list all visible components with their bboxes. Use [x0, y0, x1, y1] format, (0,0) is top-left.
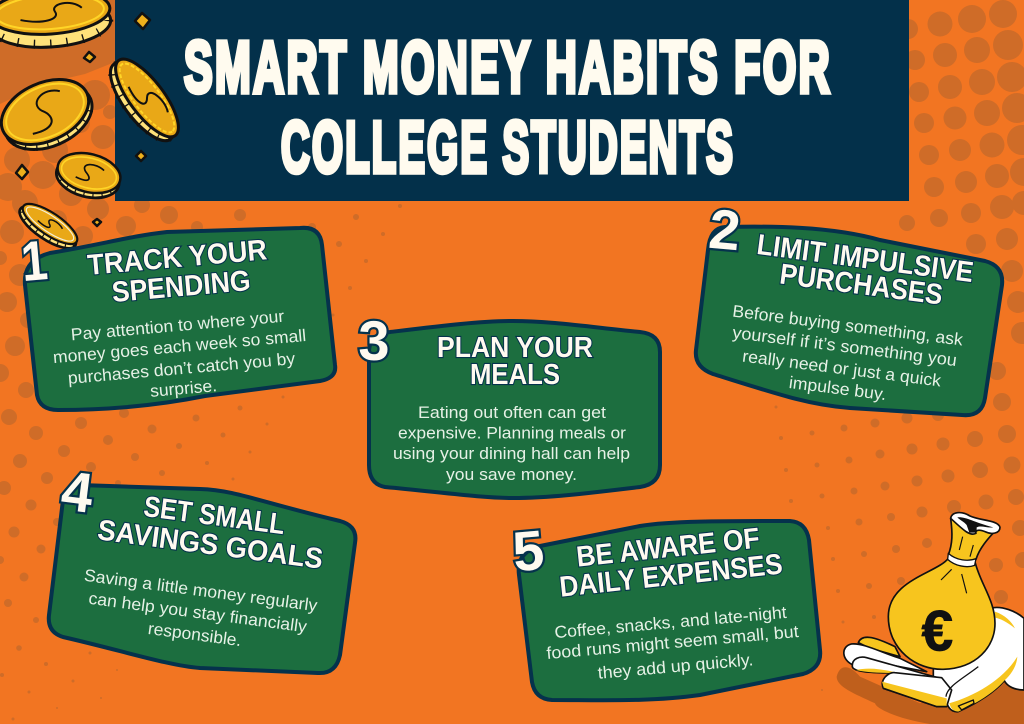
- body text: Pay attention to where your: [70, 307, 285, 344]
- heading: MEALS: [470, 359, 560, 391]
- body text: Saving a little money regularly: [83, 566, 319, 615]
- panel 2: limit impulsive purchases: [696, 197, 1002, 415]
- heading: SET SMALL: [142, 491, 287, 541]
- hand: [844, 607, 1024, 712]
- icon: money bag on open hand: [837, 513, 1024, 724]
- body text: money goes each week so small: [52, 326, 307, 367]
- heading: SAVINGS GOALS: [96, 514, 325, 576]
- panel 5: be aware of daily expenses: [510, 518, 820, 700]
- body text: using your dining hall can help: [393, 444, 630, 463]
- number 3: 3: [358, 309, 390, 372]
- body text: impulse buy.: [788, 373, 887, 404]
- back finger: [858, 637, 900, 657]
- body text: you save money.: [446, 465, 577, 484]
- body text: [731, 302, 964, 404]
- heading: BE AWARE OF: [575, 523, 761, 574]
- finger one: [844, 644, 927, 672]
- body text: really need or just a quick: [741, 347, 943, 391]
- heading: [96, 491, 325, 576]
- heading: SPENDING: [111, 265, 252, 309]
- body text: [83, 566, 319, 650]
- number 1: 1: [19, 228, 50, 293]
- number 4: 4: [58, 458, 97, 525]
- heading: LIMIT IMPULSIVE: [755, 229, 975, 289]
- heading: [437, 332, 593, 391]
- bag: [888, 558, 995, 669]
- body text: they add up quickly.: [597, 650, 754, 683]
- body text: [393, 403, 630, 484]
- heading: TRACK YOUR: [86, 234, 268, 282]
- finger three: [882, 673, 952, 707]
- coin right: [100, 50, 189, 150]
- coin left: [0, 66, 102, 163]
- heading: PURCHASES: [778, 259, 945, 312]
- body text: responsible.: [147, 619, 243, 650]
- panel 4: set small savings goals: [49, 458, 355, 673]
- finger two: [852, 657, 940, 682]
- sparkles: [16, 13, 150, 226]
- body text: can help you stay financially: [87, 589, 309, 636]
- body text: food runs might seem small, but: [546, 622, 800, 663]
- heading: [86, 234, 268, 309]
- coin top: [0, 0, 112, 51]
- body text: yourself if it’s something you: [731, 323, 958, 370]
- body text: Eating out often can get: [418, 403, 606, 422]
- body text: Before buying something, ask: [731, 302, 964, 350]
- body text: expensive. Planning meals or: [398, 424, 626, 442]
- body text: [546, 603, 800, 683]
- number 2: 2: [706, 197, 743, 262]
- body text: [52, 307, 307, 401]
- coin bottom: [14, 196, 84, 256]
- icon: falling gold coins: [0, 0, 189, 256]
- palm and wrist: [933, 607, 1024, 712]
- thumb crease: [946, 667, 978, 710]
- body text: Coffee, snacks, and late-night: [554, 603, 788, 642]
- body text: purchases don’t catch you by: [67, 349, 296, 388]
- heading: [558, 523, 784, 604]
- body text: surprise.: [149, 376, 218, 401]
- title banner: [115, 0, 909, 201]
- panel 3: plan your meals: [358, 309, 660, 498]
- coin middle: [52, 147, 125, 204]
- heading: PLAN YOUR: [437, 332, 593, 364]
- number 5: 5: [510, 518, 547, 583]
- panel 1: track your spending: [19, 228, 335, 410]
- heading: DAILY EXPENSES: [558, 548, 784, 604]
- hand shadow: [837, 667, 1024, 724]
- euro symbol: €: [921, 600, 953, 664]
